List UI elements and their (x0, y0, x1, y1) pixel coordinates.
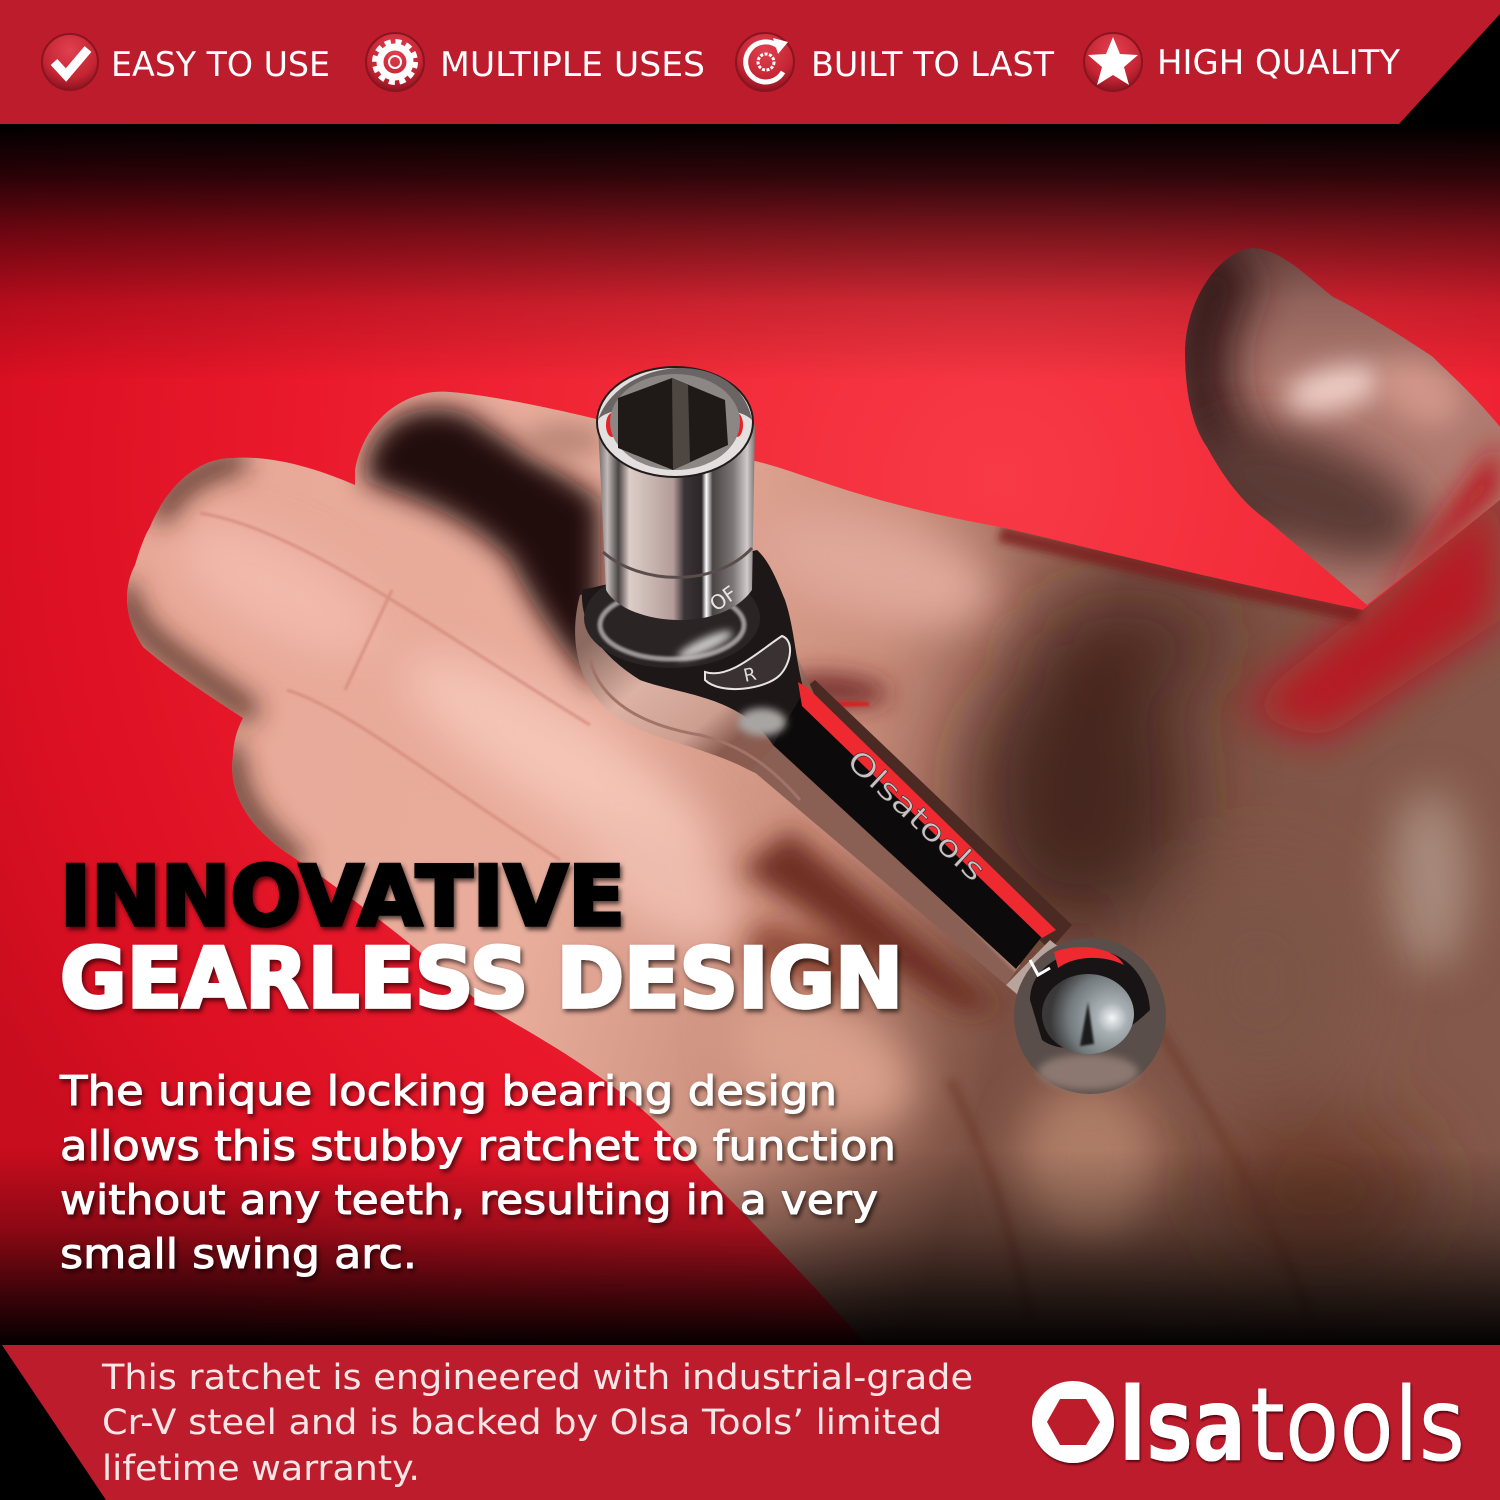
fingertip shadows (125, 462, 300, 865)
icon: star badge (1084, 33, 1142, 91)
index finger pale top (523, 424, 607, 456)
palm creases (946, 1031, 1234, 1236)
body text (59, 1067, 896, 1278)
ratchet tool: R (742, 664, 758, 687)
logo: O (1032, 1366, 1114, 1485)
palm shadows (970, 600, 1430, 1270)
heading line 1: INNOVATIVE (60, 848, 625, 945)
head inner pink contour (590, 660, 800, 800)
silver smear at handle start (738, 708, 786, 736)
corner black triangle (0, 1345, 104, 1500)
body text: The unique locking bearing design (59, 1067, 837, 1115)
socket opening (610, 374, 740, 470)
engraved logo on handle: Olsatools (840, 743, 992, 889)
body text: allows this stubby ratchet to function (60, 1122, 896, 1170)
logo (1032, 1366, 1465, 1485)
ball stem (1006, 940, 1075, 1005)
icon: check badge (42, 34, 98, 90)
index finger shadow (365, 408, 600, 690)
flange silver smear (675, 626, 735, 664)
socket top rim shade (598, 368, 752, 420)
handle dark face (773, 698, 1044, 969)
feature: multiple uses (366, 33, 705, 91)
handle red reflection (798, 682, 1056, 938)
hex inner facets (672, 378, 690, 470)
red slivers on rim (606, 413, 743, 437)
banner shape (2, 1345, 1500, 1500)
dark red rim along palm top (1000, 534, 1360, 614)
heading line 2: GEARLESS DESIGN (60, 930, 903, 1027)
skin highlights (163, 491, 1470, 1240)
flange chrome ring (584, 568, 760, 668)
warranty text: This ratchet is engineered with industrial-grade (101, 1358, 973, 1398)
icon: cycle gear badge (736, 33, 794, 91)
feature: easy to use (42, 34, 330, 90)
banner shape (0, 0, 1500, 124)
red glow on palm (1240, 480, 1500, 740)
label: easy to use: EASY TO USE (111, 45, 330, 85)
socket cylinder (598, 425, 755, 620)
top banner (0, 0, 1500, 124)
warranty text: lifetime warranty. (102, 1449, 420, 1489)
top dark fade (0, 124, 1500, 380)
red reflection under head (836, 700, 871, 708)
hand silhouette: palm and fingers (100, 380, 1500, 1350)
handle outer dark edge (790, 680, 1072, 950)
bottom dark fade (0, 1150, 1500, 1346)
engraved size on socket: OF (705, 581, 741, 616)
label: built to last: BUILT TO LAST (811, 45, 1054, 85)
socket rim (597, 367, 753, 477)
logo: lsa (1119, 1366, 1246, 1485)
shadow beside handle (740, 671, 1000, 1010)
body text: without any teeth, resulting in a very (60, 1176, 878, 1224)
label: high quality: HIGH QUALITY (1157, 43, 1400, 83)
direction mark R (705, 636, 790, 689)
ball neck highlight (1030, 960, 1050, 975)
head dark top face (582, 550, 805, 745)
socket groove (603, 548, 752, 577)
logo: tools (1250, 1366, 1465, 1485)
feature: high quality (1084, 33, 1400, 91)
corner black triangle (1400, 0, 1500, 124)
head body (575, 550, 830, 790)
label: multiple uses: MULTIPLE USES (440, 45, 705, 85)
finger creases (200, 513, 590, 860)
icon: gear badge (366, 33, 424, 91)
warranty text: Cr-V steel and is backed by Olsa Tools’ limited (102, 1403, 942, 1443)
warranty text (101, 1358, 973, 1489)
feature: built to last (736, 33, 1054, 91)
thumb (1185, 248, 1500, 605)
bottom banner (0, 1345, 1500, 1500)
body text: small swing arc. (60, 1230, 417, 1278)
handle lower bevel (752, 740, 1020, 985)
ball end (1014, 938, 1166, 1094)
heading (60, 848, 903, 1027)
hex opening (618, 378, 728, 470)
ratchet tool (575, 367, 1166, 1094)
flange highlight ring (600, 591, 744, 659)
